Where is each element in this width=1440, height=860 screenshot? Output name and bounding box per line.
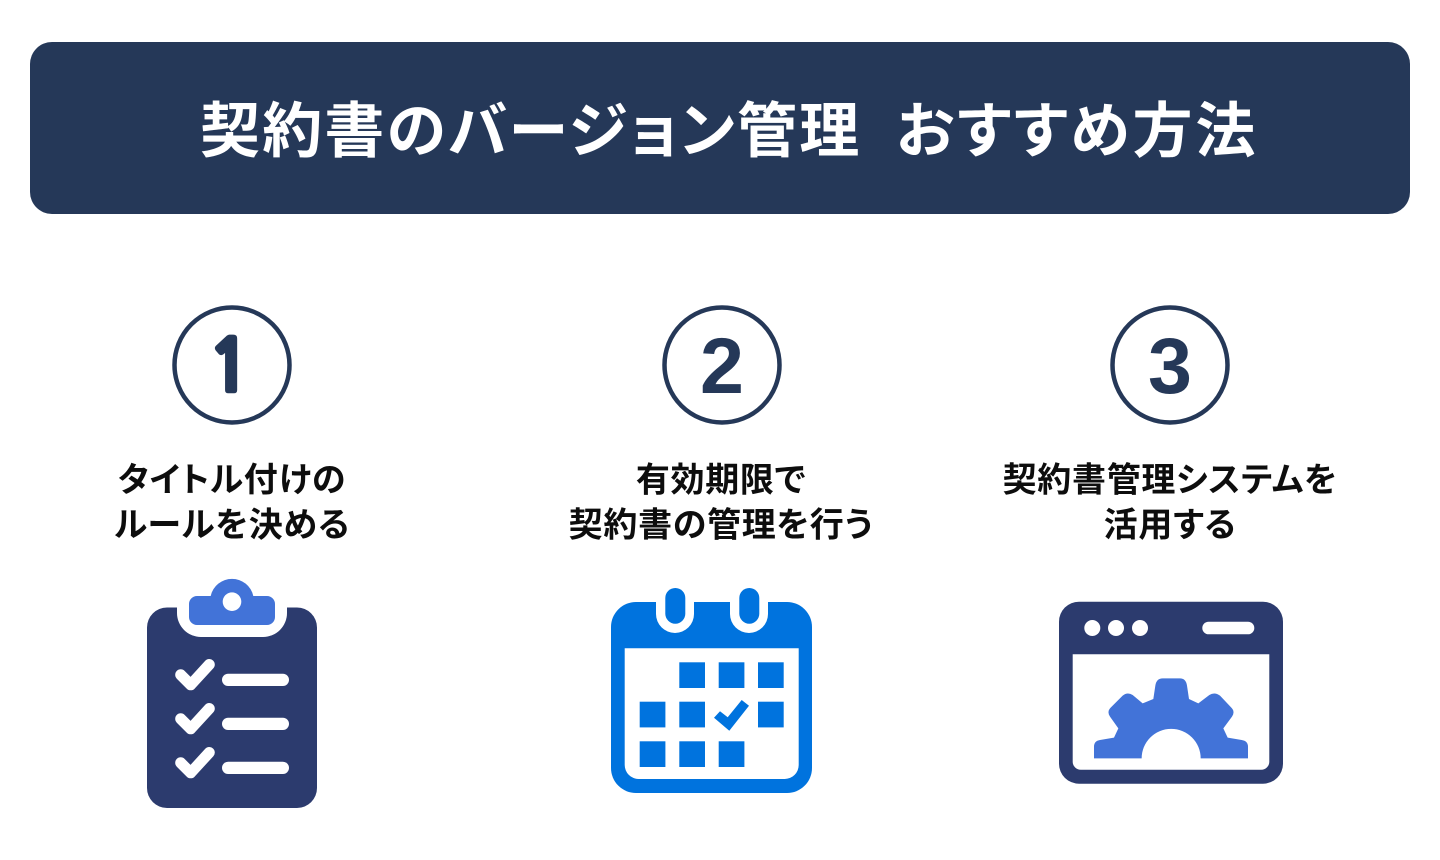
step 3 heading: 活用する: [1104, 506, 1236, 544]
number badge 2: [664, 308, 780, 422]
number badge 3: [1112, 308, 1228, 422]
number badge 1: [174, 308, 290, 422]
icon: clipboard checklist: [147, 579, 317, 808]
step 2 heading: 有効期限で: [636, 462, 806, 500]
number badge 1: 1: [208, 331, 251, 402]
number badge 3: 3: [1148, 321, 1192, 410]
step 2 column: [569, 308, 873, 793]
step 2 heading: 契約書の管理を行う: [569, 506, 873, 544]
title banner: [30, 42, 1410, 214]
icon: browser window with gear: [1059, 602, 1283, 784]
step 3 column: [1003, 308, 1337, 784]
icon: calendar: [611, 588, 812, 793]
step 1 heading: ルールを決める: [114, 506, 350, 544]
step 1 column: [114, 308, 350, 808]
step 1 heading: タイトル付けの: [118, 462, 346, 500]
title text: 契約書のバージョン管理: [200, 98, 861, 165]
title text: おすすめ方法: [896, 98, 1258, 165]
number badge 2: 2: [700, 321, 744, 410]
step 3 heading: 契約書管理システムを: [1003, 462, 1337, 500]
